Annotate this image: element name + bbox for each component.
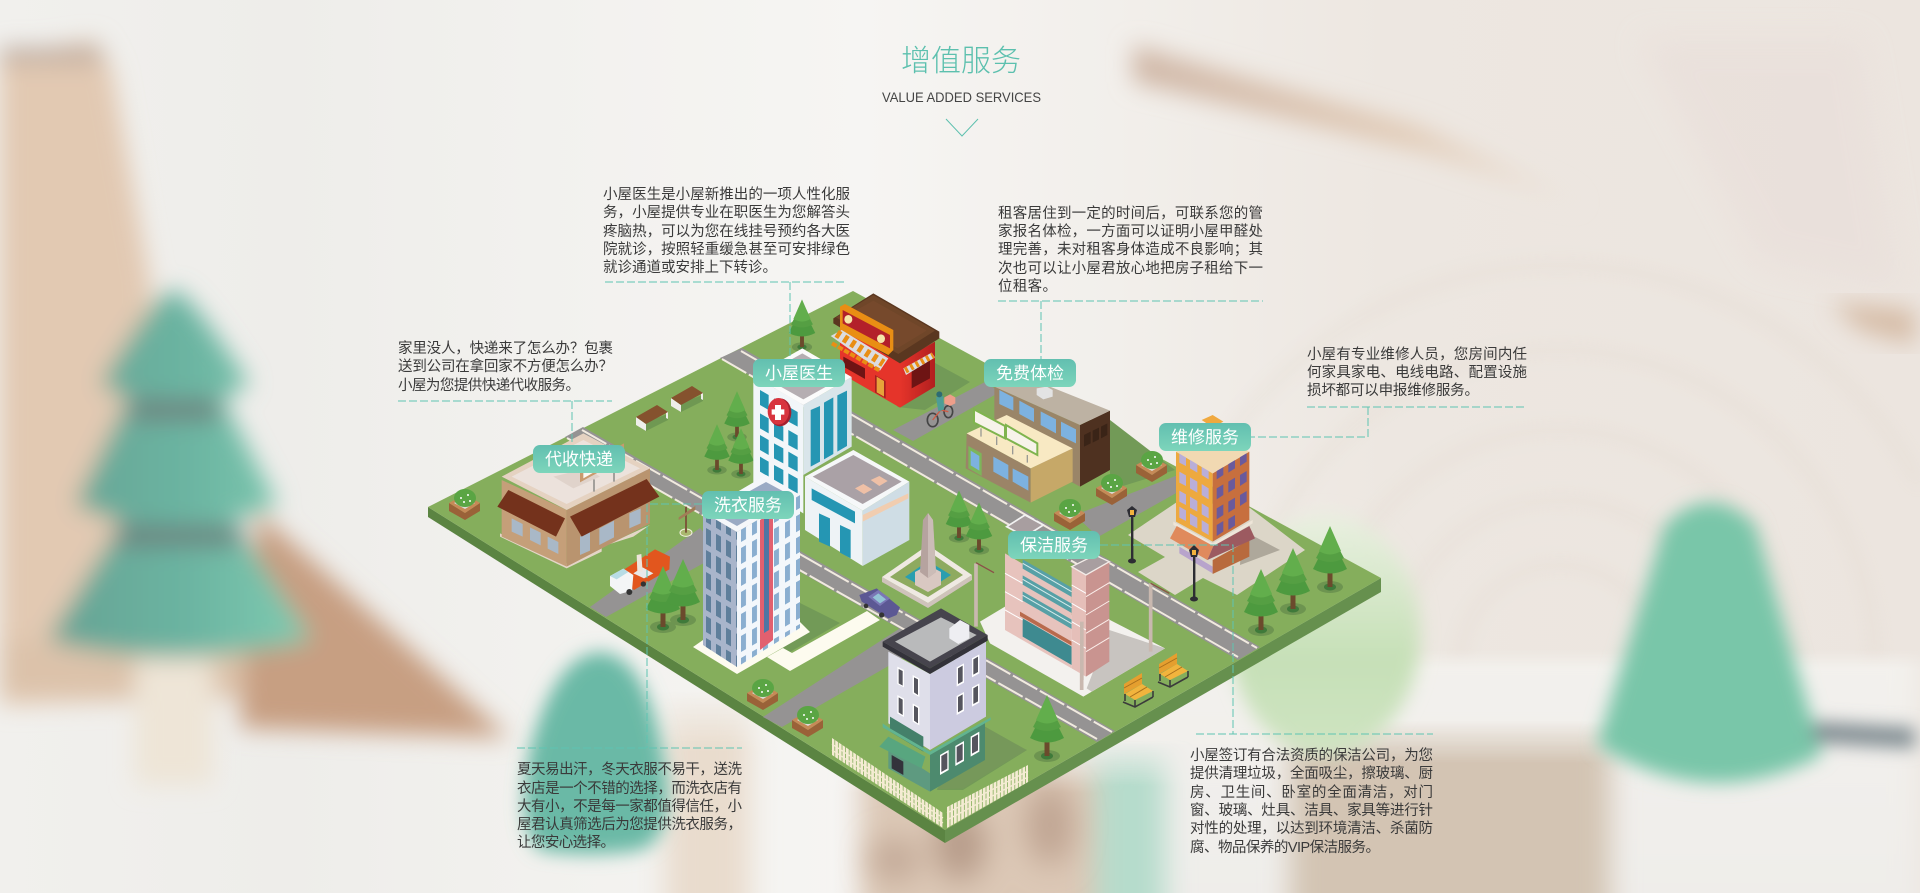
label: 代收快递: 代收快递 [545, 450, 613, 469]
text block: laundry service [517, 748, 742, 851]
text block: doctor service: 小屋医生是小屋新推出的一项人性化服 [603, 186, 850, 203]
text block: repair service [1307, 346, 1527, 407]
text block: parcel collection: 家里没人，快递来了怎么办？包裹 [398, 340, 613, 357]
street lamps [1127, 506, 1199, 602]
text block: free health check: 位租客。 [998, 278, 1057, 295]
building: hospital [753, 348, 909, 566]
label: 洗衣服务 [702, 491, 794, 519]
trees front left [646, 559, 700, 633]
text block: parcel collection [398, 340, 613, 401]
top right diagonal bar [1133, 45, 1585, 205]
text block: cleaning service: 房、卫生间、卧室的全面清洁，对门 [1190, 783, 1433, 801]
blurred foreground trees [524, 502, 1915, 854]
building: red shop [831, 293, 939, 408]
building: parcel store [497, 433, 659, 568]
title [882, 45, 1041, 105]
text block: parcel collection: 小屋为您提供快递代收服务。 [398, 377, 580, 394]
delivery truck [610, 549, 670, 595]
text block: cleaning service [1190, 734, 1433, 856]
text block: cleaning service: 提供清理垃圾，全面吸尘，擦玻璃、厨 [1190, 764, 1433, 782]
left wood column [0, 40, 165, 705]
connector lines [572, 282, 1368, 748]
label: 保洁服务 [1008, 531, 1100, 559]
left tree [48, 290, 312, 656]
wood ring arcs [1155, 265, 1920, 665]
wooden benches [636, 386, 703, 431]
building shadows [783, 363, 1280, 790]
bottom wood tones [665, 690, 1610, 893]
title: VALUE ADDED SERVICES [882, 89, 1041, 105]
text block: free health check: 租客居住到一定的时间后，可联系您的管 [998, 205, 1263, 222]
trees right corner [1030, 526, 1347, 762]
label: 代收快递 [533, 445, 625, 473]
text block: free health check [998, 205, 1263, 301]
fence [832, 738, 1028, 828]
text block: doctor service: 务，小屋提供专业在职医生为您解答头 [603, 204, 850, 221]
text block: free health check: 家报名体检，一方面可以证明小屋甲醛处 [998, 223, 1263, 240]
trees back [704, 299, 992, 555]
building: laundry tower [693, 475, 880, 674]
car [859, 588, 900, 618]
text block: laundry service: 屋君认真筛选后为您提供洗衣服务， [517, 815, 742, 833]
pale floor band [1040, 650, 1920, 893]
text block: doctor service [603, 186, 850, 282]
icon: red cross sign [768, 398, 791, 426]
text block: repair service: 何家具家电、电线电路、配置设施 [1307, 364, 1527, 381]
text block: repair service: 小屋有专业维修人员，您房间内任 [1307, 346, 1527, 363]
text block: doctor service: 院就诊，按照轻重缓急甚至可安排绿色 [603, 241, 850, 258]
text block: laundry service: 夏天易出汗，冬天衣服不易干，送洗 [517, 761, 742, 778]
text block: parcel collection: 送到公司在拿回家不方便怎么办？ [398, 357, 613, 375]
building: clinic block [966, 373, 1110, 503]
isometric city platform [428, 282, 1381, 843]
text block: laundry service: 衣店是一个不错的选择，而洗衣店有 [517, 780, 742, 797]
icon: chevron down [946, 119, 978, 136]
label: 免费体检: 免费体检 [996, 364, 1064, 383]
title: 增值服务 [901, 45, 1021, 78]
text block: laundry service: 让您安心选择。 [517, 834, 615, 851]
text block: cleaning service: 小屋签订有合法资质的保洁公司，为您 [1190, 747, 1433, 764]
label: 洗衣服务: 洗衣服务 [714, 496, 782, 515]
yellow benches [1123, 653, 1188, 707]
text block: cleaning service: 对性的处理，以达到环境清洁、杀菌防 [1190, 819, 1433, 837]
label: 维修服务: 维修服务 [1171, 428, 1239, 447]
label: 小屋医生 [753, 359, 845, 387]
label: 保洁服务: 保洁服务 [1020, 536, 1088, 555]
text block: cleaning service: 窗、玻璃、灶具、洁具、家具等进行针 [1190, 801, 1433, 819]
building: cleaning service [976, 563, 1169, 697]
label: 维修服务 [1159, 423, 1251, 451]
text block: doctor service: 疼脑热，可以为您在线挂号预约各大医 [603, 223, 850, 240]
pavement around repair tower [1128, 500, 1305, 595]
building: repair tower [1170, 415, 1255, 574]
signpost [679, 506, 695, 536]
text block: free health check: 次也可以让小屋君放心地把房子租给下一 [998, 260, 1263, 277]
roads [565, 348, 1260, 742]
label: 小屋医生: 小屋医生 [765, 364, 833, 383]
text block: laundry service: 大有小，不是每一家都值得信任，小 [517, 798, 742, 815]
text block: repair service: 损坏都可以申报维修服务。 [1307, 382, 1479, 399]
text block: cleaning service: 腐、物品保养的VIP保洁服务。 [1190, 838, 1380, 856]
cyclist [927, 391, 955, 427]
text block: free health check: 理完善，未对租客身体造成不良影响；其 [998, 241, 1263, 258]
label: 免费体检 [984, 359, 1076, 387]
fountain obelisk plaza [882, 513, 972, 608]
planters [449, 451, 1167, 737]
text block: doctor service: 就诊通道或安排上下转诊。 [603, 259, 777, 276]
building: grey roof apartments [879, 608, 1027, 792]
